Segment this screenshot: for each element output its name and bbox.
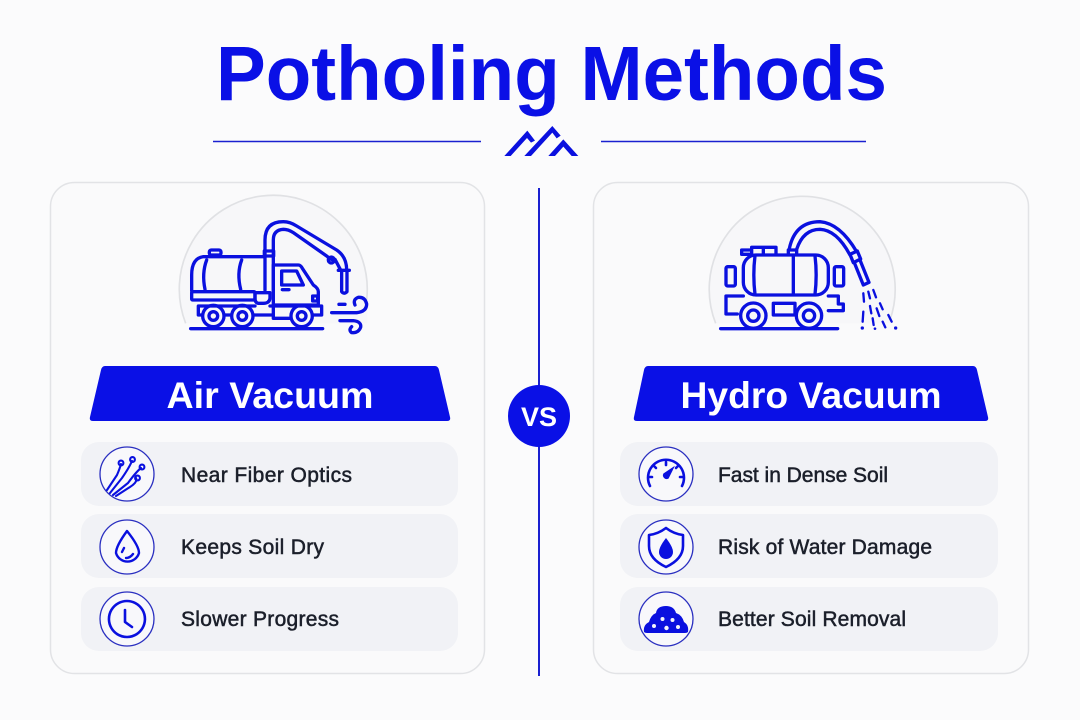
panel: hydro vacuum bbox=[594, 182, 1028, 674]
banner: air vacuum bbox=[90, 366, 450, 421]
panel: air vacuum bbox=[50, 182, 484, 674]
vs badge bbox=[508, 385, 570, 447]
item: near fiber optics bbox=[81, 442, 458, 506]
item: slower progress bbox=[81, 587, 458, 651]
icon: air vacuum truck bbox=[179, 195, 368, 333]
centre divider line bbox=[538, 188, 540, 676]
item: fast in dense soil bbox=[620, 442, 998, 506]
item: slower progress: Slower Progress bbox=[181, 608, 339, 631]
item: risk of water damage: Risk of Water Damage bbox=[718, 536, 932, 559]
item: better soil removal: Better Soil Removal bbox=[718, 608, 906, 631]
icon: hydro vacuum truck bbox=[709, 196, 897, 330]
icon: fiber optics bbox=[107, 457, 144, 496]
item: keeps soil dry: Keeps Soil Dry bbox=[181, 536, 324, 559]
title: Potholing Methods bbox=[216, 31, 887, 117]
icon: shield with drop bbox=[649, 528, 683, 567]
item: near fiber optics: Near Fiber Optics bbox=[181, 464, 352, 487]
icon: soil pile bbox=[644, 606, 688, 633]
icon: speedometer bbox=[648, 460, 684, 486]
item: risk of water damage bbox=[620, 514, 998, 578]
title divider with mountain icon bbox=[213, 126, 866, 156]
banner: air vacuum: Air Vacuum bbox=[166, 375, 374, 416]
banner: hydro vacuum: Hydro Vacuum bbox=[680, 375, 942, 416]
banner: hydro vacuum bbox=[634, 366, 988, 421]
icon: water drop bbox=[116, 531, 139, 562]
item: better soil removal bbox=[620, 587, 998, 651]
item: keeps soil dry bbox=[81, 514, 458, 578]
item: fast in dense soil: Fast in Dense Soil bbox=[718, 464, 888, 487]
vs badge: VS bbox=[521, 402, 557, 432]
icon: clock bbox=[109, 601, 145, 637]
